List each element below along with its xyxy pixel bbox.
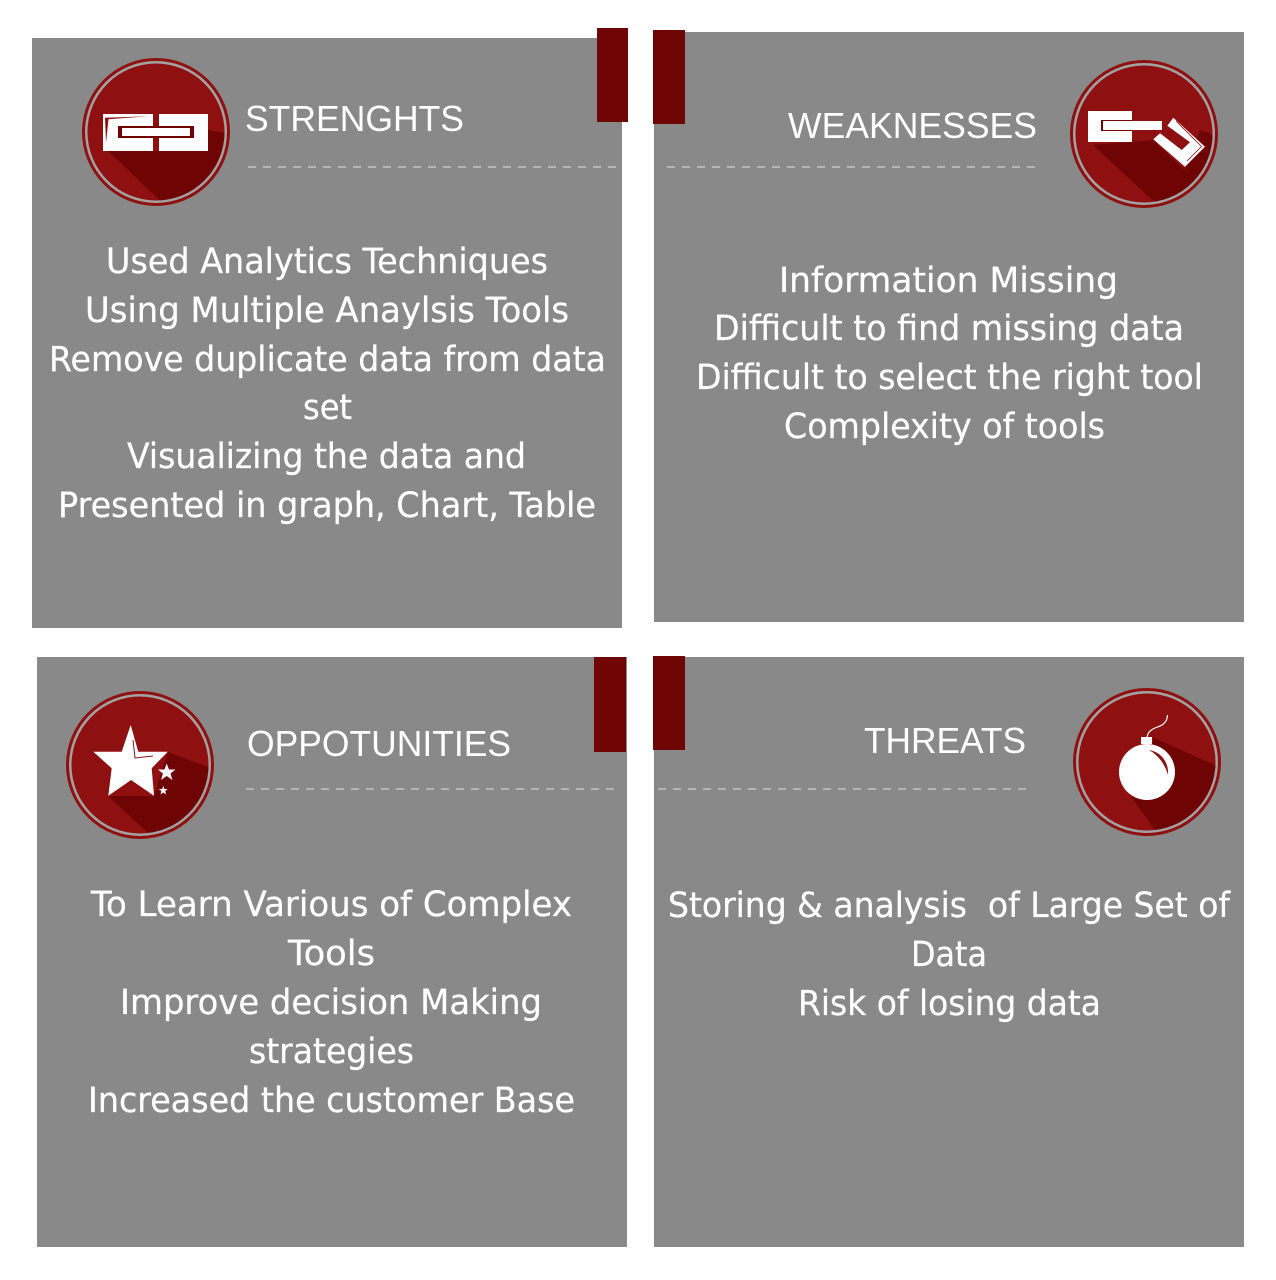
body text: strengths <box>49 242 606 526</box>
body text: strengths: Presented in graph, Chart, Table <box>58 486 596 526</box>
panel: threats <box>653 656 1244 1247</box>
tab: threats <box>653 656 685 750</box>
body text: weaknesses: Information Missing <box>779 261 1118 301</box>
body text: opportunities: Improve decision Making <box>120 983 542 1023</box>
tab: strengths <box>597 28 628 122</box>
body text: threats: Data <box>911 935 987 975</box>
icon: bomb <box>1073 688 1221 836</box>
panel: weaknesses <box>653 30 1244 622</box>
body text: opportunities: To Learn Various of Complex <box>90 885 572 925</box>
body text: opportunities: Increased the customer Base <box>88 1081 575 1121</box>
body text: opportunities: Tools <box>287 934 375 974</box>
panel: strengths <box>32 28 628 628</box>
body text: threats: Risk of losing data <box>798 984 1101 1024</box>
icon: separated chain link <box>1070 60 1218 208</box>
body text: weaknesses: Difficult to find missing data <box>714 309 1184 349</box>
body text: strengths: Used Analytics Techniques <box>106 242 548 282</box>
body text: opportunities: strategies <box>249 1032 414 1072</box>
tab: opportunities <box>594 657 626 752</box>
body text: opportunities <box>88 885 575 1121</box>
body text: threats: Storing & analysis of Large Set of <box>668 886 1231 926</box>
icon: chain link broken <box>82 58 230 206</box>
body text: strengths: set <box>303 388 352 428</box>
body text: strengths: Using Multiple Anaylsis Tools <box>85 291 569 331</box>
body text: threats <box>668 886 1231 1024</box>
tab: weaknesses <box>653 30 685 124</box>
body text: strengths: Visualizing the data and <box>127 437 526 477</box>
body text: weaknesses: Difficult to select the right tool <box>696 358 1203 398</box>
body text: weaknesses <box>696 261 1203 447</box>
heading: opportunities: OPPOTUNITIES <box>247 723 511 764</box>
icon: stars <box>66 691 214 839</box>
body text: weaknesses: Complexity of tools <box>784 407 1105 447</box>
panel: opportunities <box>37 657 627 1247</box>
heading: weaknesses: WEAKNESSES <box>788 105 1037 146</box>
heading: threats: THREATS <box>864 720 1026 761</box>
heading: strengths: STRENGHTS <box>245 98 464 139</box>
body text: strengths: Remove duplicate data from data <box>49 340 606 380</box>
